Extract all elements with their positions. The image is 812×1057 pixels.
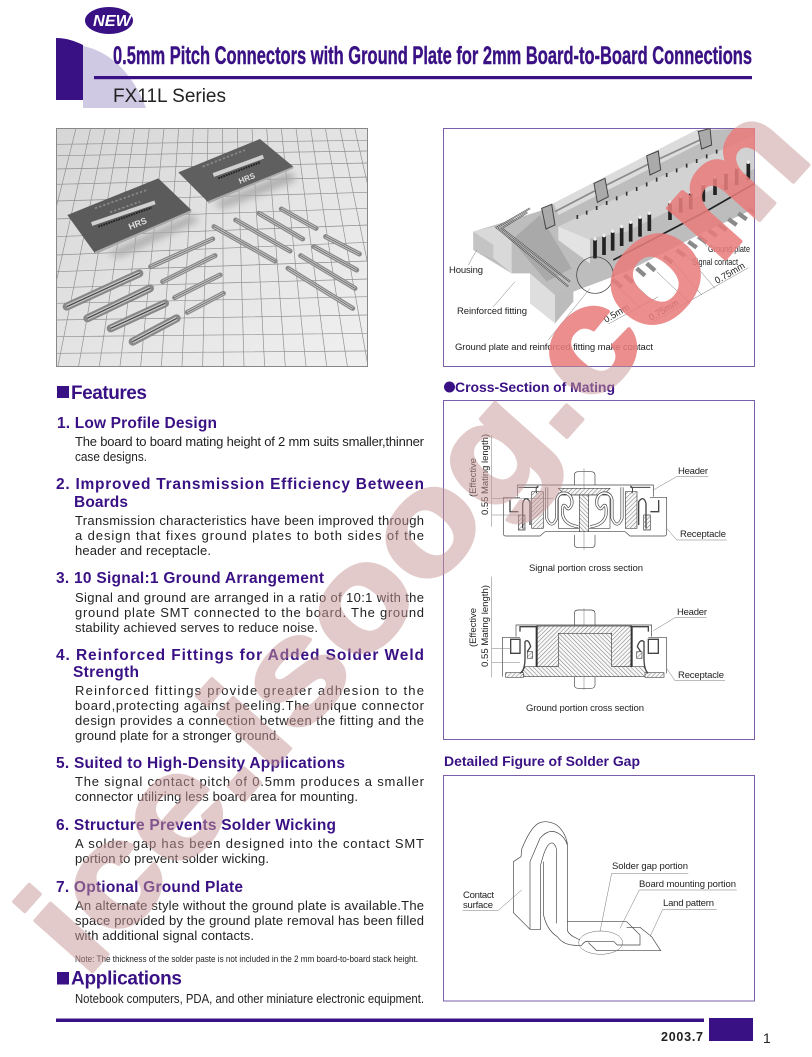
ground plate rail [497, 208, 570, 287]
panel: product photo: HRS [127, 215, 148, 232]
cross-section labels: Ground portion cross section [526, 703, 644, 714]
feature 5: 5. Suited to High-Density Applications [56, 755, 345, 772]
leaders [577, 257, 613, 293]
cross-section labels: (Effective [468, 608, 479, 647]
feature 2 [56, 476, 424, 558]
feature 7 [56, 879, 424, 943]
feature 6 [56, 817, 424, 866]
solder gap labels: Land pattern [663, 898, 714, 909]
feature 1: The board to board mating height of 2 mm suits smaller,thinner [75, 434, 425, 449]
cross-section labels [468, 434, 726, 714]
feature 4: design provides a connection between the fitting and the [75, 713, 424, 728]
feature 2: Boards [74, 494, 128, 511]
footer box [709, 1018, 753, 1041]
page number: 1 [763, 1030, 771, 1046]
feature 5: The signal contact pitch of 0.5mm produces a smaller [75, 774, 425, 789]
photo connectors [67, 273, 177, 342]
feature 2: 2. Improved Transmission Efficiency Between [56, 476, 424, 493]
cross-section labels: Header [678, 466, 708, 477]
header: NEW badge: NEW [93, 13, 133, 30]
title rule [94, 76, 752, 79]
feature 6: 6. Structure Prevents Solder Wicking [56, 817, 336, 834]
cross-section labels: 0.55 Mating length) [480, 585, 491, 667]
cross-section labels: Receptacle [678, 670, 724, 681]
cross-section labels: Signal portion cross section [529, 563, 643, 574]
note: Note: The thickness of the solder paste is not included in the 2 mm board-to-board stack height. [75, 954, 418, 965]
cross-section labels: 0.55 Mating length) [480, 434, 491, 515]
heading: applications: Applications [71, 968, 182, 990]
solder gap labels: Solder gap portion [612, 861, 688, 872]
feature 1: 1. Low Profile Design [57, 415, 217, 432]
footer rule [56, 1018, 704, 1022]
solder gap labels: Board mounting portion [639, 879, 736, 890]
panel: solder gap [444, 776, 754, 1001]
footer date: 2003.7 [661, 1030, 703, 1044]
connector labels: Ground plate [708, 244, 750, 255]
connector labels [449, 244, 750, 353]
connector labels: Reinforced fitting [457, 306, 527, 317]
connector labels: 0.75mm [713, 261, 747, 287]
solder gap labels [463, 861, 736, 911]
feature 4: 4. Reinforced Fittings for Added Solder Weld [56, 647, 424, 664]
feature 5: connector utilizing less board area for mounting. [75, 789, 358, 804]
feature 4: Reinforced fittings provide greater adhesion to the [75, 683, 424, 698]
feature 7: An alternate style without the ground plate is available.The [75, 898, 424, 913]
photo shadows [107, 172, 297, 257]
connector labels: Ground plate and reinforced fitting make contact [455, 342, 653, 353]
tabs [542, 128, 712, 229]
feature 2: a design that fixes ground plates to both sides of the [75, 528, 424, 543]
panel: cross-section of mating [444, 400, 754, 740]
connector labels: Signal contact [692, 257, 738, 268]
contacts [595, 163, 748, 258]
feature 7: 7. Optional Ground Plate [56, 879, 243, 896]
feature 2: header and receptacle. [75, 543, 211, 558]
solder gap labels: surface [463, 900, 493, 911]
feature 3: ground plate SMT connected to the board. The ground [75, 605, 424, 620]
feature 3: stability achieved serves to reduce noise. [75, 620, 318, 635]
diagram: signal portion [492, 435, 727, 550]
cross-section labels: Header [677, 607, 707, 618]
heading: features: Features [71, 383, 147, 404]
connector labels: 0.5mm [602, 302, 632, 326]
central block [558, 148, 754, 240]
diagram: contact [463, 822, 737, 954]
feature 4 [56, 647, 425, 743]
cross-section labels: (Effective [468, 458, 479, 497]
feature 5 [56, 755, 425, 804]
feature 4: Strength [73, 664, 139, 681]
connector labels: 0.75mm [647, 298, 681, 324]
feature 3: Signal and ground are arranged in a ratio of 10:1 with the [75, 590, 424, 605]
applications text: Notebook computers, PDA, and other miniature electronic equipment. [75, 991, 424, 1006]
panel: product photo [56, 128, 368, 367]
feature 2: Transmission characteristics have been improved through [75, 513, 424, 528]
photo grid [57, 129, 367, 366]
feature 3: 3. 10 Signal:1 Ground Arrangement [56, 570, 324, 587]
panel: product photo: HRS [237, 171, 257, 186]
header: NEW badge [85, 7, 133, 34]
feature 1 [57, 415, 425, 464]
feature 4: ground plate for a stronger ground. [75, 728, 280, 743]
solder tails [613, 208, 757, 287]
cross-section labels: Receptacle [680, 529, 726, 540]
series name: FX11L Series [113, 86, 226, 107]
feature 1: case designs. [75, 449, 147, 464]
feature 7: space provided by the ground plate removal has been filled [75, 913, 424, 928]
connector body [473, 128, 755, 323]
feature 4: board,protecting against peeling.The unique connector [75, 698, 425, 713]
diagram: ground portion [492, 577, 725, 690]
connector labels: Housing [449, 265, 483, 276]
feature 3 [56, 570, 424, 635]
header: corner decoration [56, 38, 146, 108]
feature 6: A solder gap has been designed into the contact SMT [75, 836, 424, 851]
photo boards [67, 178, 191, 253]
heading: solder gap: Detailed Figure of Solder Gap [444, 753, 640, 769]
feature 7: with additional signal contacts. [74, 928, 254, 943]
feature 6: portion to prevent solder wicking. [75, 851, 269, 866]
solder gap labels: Contact [463, 890, 494, 901]
heading: cross-section: Cross-Section of Mating [455, 379, 615, 395]
panel: connector 3D view [444, 128, 757, 366]
